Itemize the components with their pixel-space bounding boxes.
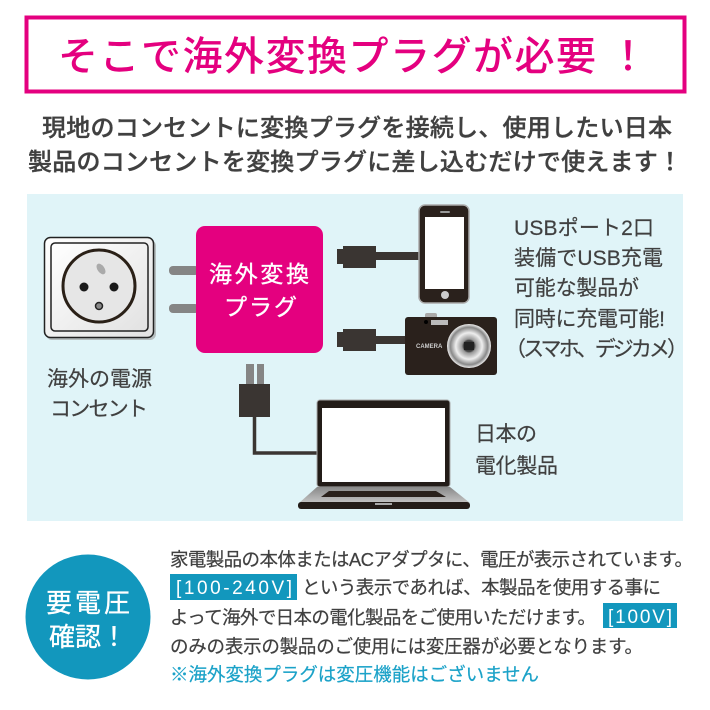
conversion plug — [196, 226, 323, 353]
label: 100-240V: [100-240V] — [176, 578, 292, 599]
USB port text: USBポート2口 — [514, 217, 654, 240]
icon: camera: CAMERA — [416, 344, 443, 350]
icon: Japanese appliance plug and cord — [239, 364, 317, 453]
intro text: 現地のコンセントに変換プラグを接続し、使用したい日本 — [42, 115, 672, 142]
USB port text: 同時に充電可能! — [514, 308, 665, 331]
icon: plug prongs — [169, 266, 199, 313]
outlet label: コンセント — [50, 398, 148, 421]
icon: smartphone — [419, 205, 469, 303]
intro text — [28, 115, 682, 176]
outlet label — [47, 368, 152, 421]
USB port text — [505, 217, 688, 361]
icon: USB cable to camera — [337, 329, 406, 351]
title: そこで海外変換プラグが必要 — [58, 35, 596, 79]
icon: laptop — [298, 400, 470, 509]
appliance label: 電化製品 — [475, 455, 558, 478]
conversion plug: プラグ — [224, 294, 297, 320]
conversion plug: 海外変換 — [209, 261, 309, 287]
appliance label: 日本の — [475, 423, 537, 446]
icon: camera — [405, 313, 497, 375]
voltage explanation text: のみの表示の製品のご使用には変圧器が必要となります。 — [170, 636, 643, 657]
panel: connection diagram — [27, 194, 688, 521]
badge: voltage check: 確認！ — [49, 622, 127, 652]
badge: voltage check — [26, 554, 150, 680]
voltage explanation text: という表示であれば、本製品を使用する事に — [302, 577, 661, 598]
voltage explanation text — [170, 549, 693, 685]
outlet label: 海外の電源 — [47, 368, 152, 391]
badge: voltage check: 要電圧 — [46, 588, 130, 618]
USB port text: （スマホ、デジカメ） — [505, 338, 688, 361]
voltage explanation text: 家電製品の本体またはACアダプタに、電圧が表示されています。 — [170, 549, 693, 570]
USB port text: 可能な製品が — [514, 277, 639, 300]
voltage explanation text: ※海外変換プラグは変圧機能はございません — [170, 664, 539, 685]
icon: wall outlet — [44, 238, 156, 340]
icon: USB cable to smartphone — [337, 246, 420, 268]
label: 100V: [100V] — [608, 607, 672, 628]
voltage explanation text: よって海外で日本の電化製品をご使用いただけます。 — [170, 607, 596, 628]
title — [26, 18, 684, 92]
intro text: 製品のコンセントを変換プラグに差し込むだけで使えます！ — [28, 149, 682, 176]
USB port text: 装備でUSB充電 — [514, 247, 663, 270]
appliance label — [475, 423, 558, 478]
title: ！ — [608, 35, 648, 79]
